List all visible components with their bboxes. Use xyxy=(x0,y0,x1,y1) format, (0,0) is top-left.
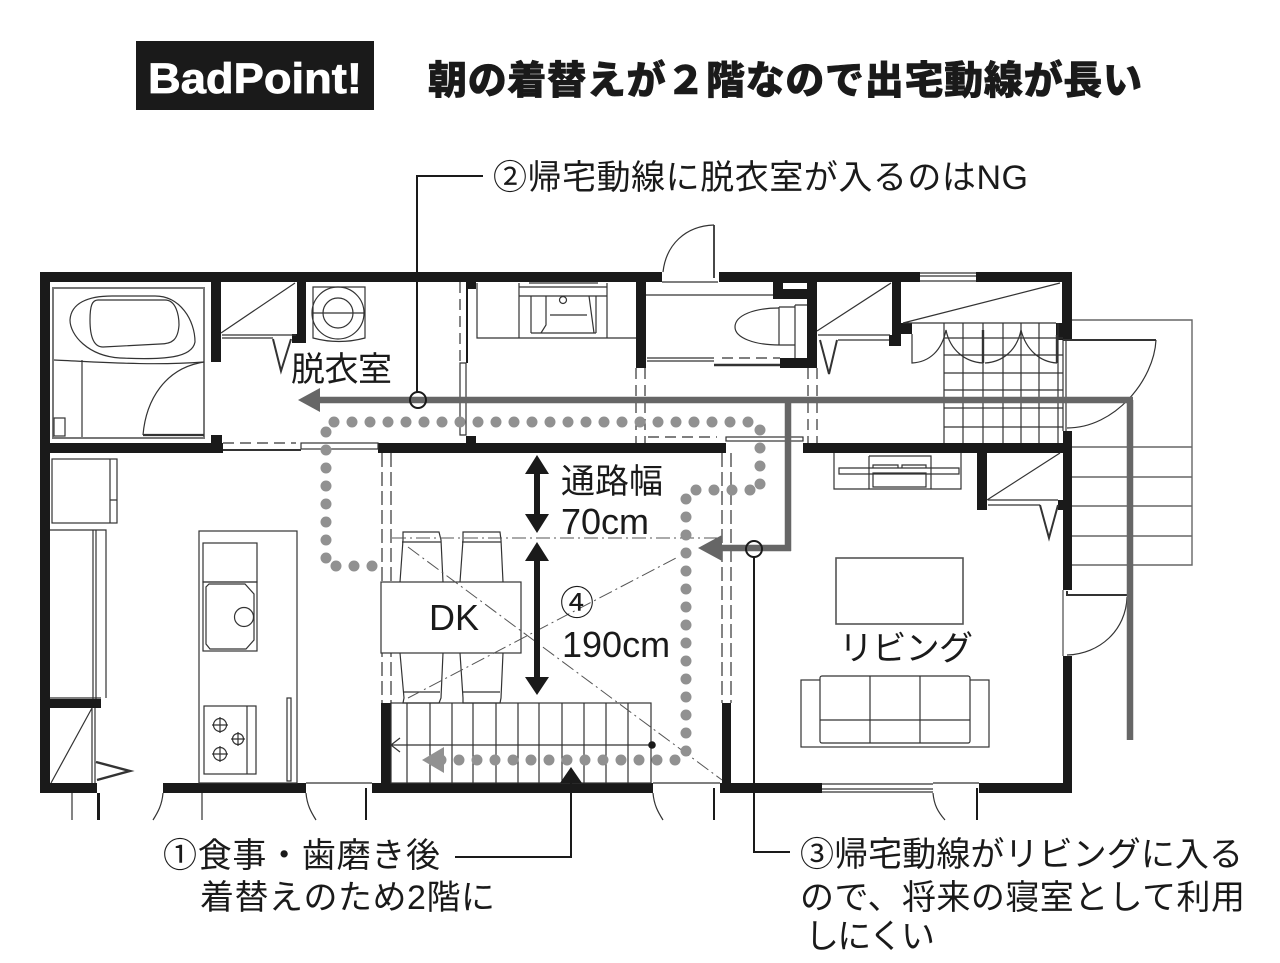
exterior stairs xyxy=(1072,320,1192,565)
label: 190cm with marker 4 xyxy=(560,585,670,665)
callout 3: しにくい xyxy=(805,918,935,956)
badge: BadPoint!: BadPoint! xyxy=(148,55,362,103)
kitchen island xyxy=(199,531,297,783)
badge: BadPoint! xyxy=(136,41,374,110)
label: DK: DK xyxy=(429,597,479,638)
leader 3 xyxy=(746,541,790,852)
callout 1: ①食事・歯磨き後 xyxy=(163,837,440,875)
callout 1 xyxy=(163,837,495,917)
windows and openings xyxy=(223,273,1066,792)
callout 3: ③帰宅動線がリビングに入る xyxy=(800,836,1243,874)
callout 3 xyxy=(800,836,1245,956)
kitchen closet and lower openings xyxy=(51,708,979,820)
side door of living room xyxy=(1067,591,1127,655)
toilet xyxy=(646,295,807,358)
arrow: 190cm xyxy=(525,542,549,695)
label: passage width xyxy=(561,463,663,542)
washstand xyxy=(477,283,636,338)
label: passage width: 通路幅 xyxy=(561,463,663,501)
tv board xyxy=(834,453,961,489)
closet by bath xyxy=(221,283,296,371)
dimension lines xyxy=(392,538,722,780)
leader 1 xyxy=(455,767,582,857)
lower closet xyxy=(987,453,1060,538)
label: living: リビング xyxy=(839,630,973,668)
unit bath xyxy=(53,288,204,438)
walls xyxy=(40,272,1072,820)
leader 2 xyxy=(410,176,483,408)
label: 190cm with marker 4: ④ xyxy=(560,585,594,623)
staircase xyxy=(391,703,656,783)
entrance storage and tiles xyxy=(903,283,1156,443)
callout 3: ので、将来の寝室として利用 xyxy=(800,879,1245,917)
refrigerator and kitchen counter xyxy=(50,459,117,699)
dining table and chairs xyxy=(381,532,521,703)
sofa xyxy=(801,676,989,747)
title: 朝の着替えが２階なので出宅動線が長い xyxy=(428,59,1142,103)
route: returning home xyxy=(298,388,1133,740)
label: 190cm with marker 4: 190cm xyxy=(562,624,670,665)
entry door xyxy=(662,225,718,282)
label: passage width: 70cm xyxy=(561,501,649,542)
route: morning dotted path xyxy=(326,422,760,773)
closet by toilet xyxy=(817,283,891,374)
washing machine xyxy=(312,287,365,342)
arrow: passage width 70cm xyxy=(525,455,549,533)
living table xyxy=(836,558,963,624)
label: dressing room: 脱衣室 xyxy=(291,351,392,389)
label: callout 2: ②帰宅動線に脱衣室が入るのはNG xyxy=(493,159,1028,197)
callout 1: 着替えのため2階に xyxy=(200,879,495,917)
